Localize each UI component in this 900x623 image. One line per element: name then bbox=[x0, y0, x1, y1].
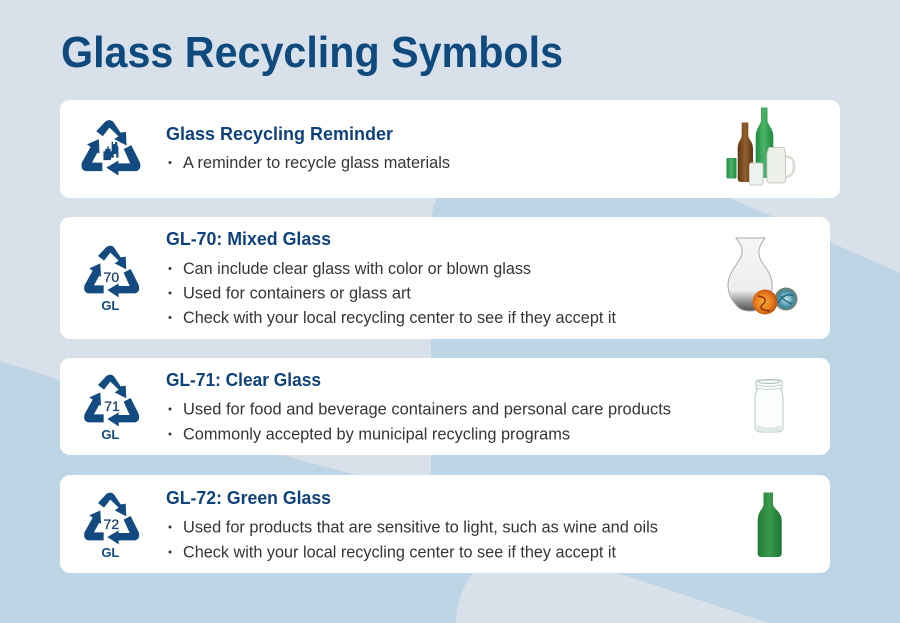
panel: GL-70 mixed glass bbox=[60, 217, 830, 339]
bullet list bbox=[168, 400, 671, 444]
bullet list bbox=[168, 518, 658, 562]
icon: recycling symbol 72 bbox=[84, 493, 139, 560]
bullet list bbox=[168, 260, 616, 327]
image: assorted glass bottles bbox=[726, 108, 794, 185]
icon: recycling symbol 70: GL bbox=[101, 298, 119, 313]
heading: GL-70: Mixed Glass bbox=[166, 229, 331, 249]
icon: recycling symbol 71: GL bbox=[101, 427, 119, 442]
icon: recycling symbol 72: 72 bbox=[104, 516, 119, 532]
icon: recycling symbol 70: 70 bbox=[104, 269, 119, 285]
bullet list: A reminder to recycle glass materials bbox=[183, 154, 450, 172]
bullet list: Can include clear glass with color or blown glass bbox=[183, 260, 531, 278]
bullet list: Check with your local recycling center to see if they accept it bbox=[183, 544, 616, 562]
bullet list: Check with your local recycling center to see if they accept it bbox=[183, 309, 616, 327]
icon: recycling symbol with bottles bbox=[81, 120, 140, 175]
image: vase and glass ornaments bbox=[728, 238, 798, 314]
icon: recycling symbol 71 bbox=[84, 375, 139, 442]
icon: recycling symbol 70 bbox=[84, 246, 139, 313]
image: green glass bottle bbox=[758, 492, 782, 557]
bullet list: Used for products that are sensitive to light, such as wine and oils bbox=[183, 518, 658, 536]
panel: glass recycling reminder bbox=[60, 100, 840, 198]
panel: GL-72 green glass bbox=[60, 475, 830, 573]
bullet list: Used for containers or glass art bbox=[183, 284, 411, 302]
heading: GL-72: Green Glass bbox=[166, 488, 331, 508]
icon: recycling symbol 72: GL bbox=[101, 545, 119, 560]
heading: GL-71: Clear Glass bbox=[166, 370, 321, 390]
bullet list: Used for food and beverage containers and personal care products bbox=[183, 400, 671, 418]
heading: Glass Recycling Reminder bbox=[166, 124, 393, 144]
image: clear glass jar bbox=[755, 380, 783, 432]
icon: recycling symbol 71: 71 bbox=[104, 398, 120, 414]
panel: GL-71 clear glass bbox=[60, 358, 830, 455]
bullet list: Commonly accepted by municipal recycling programs bbox=[183, 426, 570, 444]
title: Glass Recycling Symbols bbox=[61, 28, 563, 77]
